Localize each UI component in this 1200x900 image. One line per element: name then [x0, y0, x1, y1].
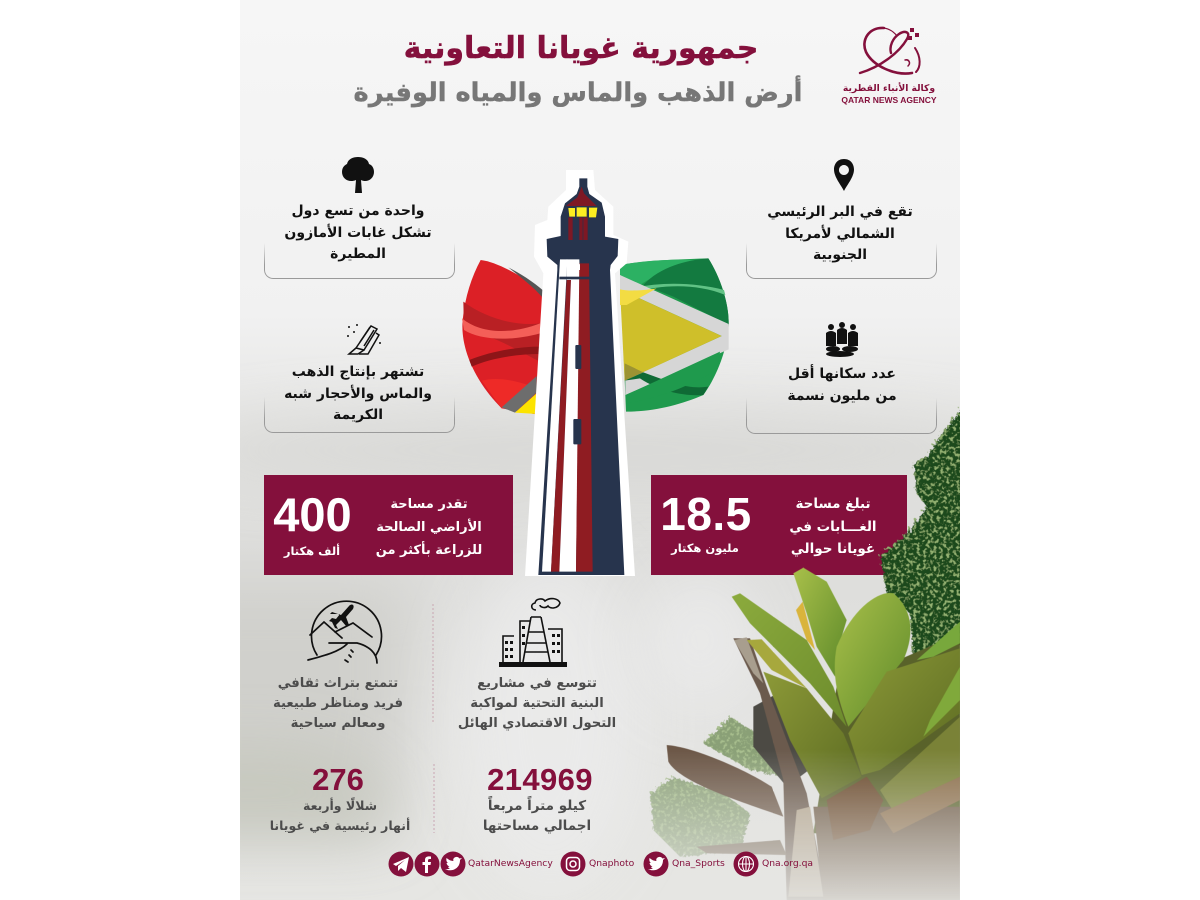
card outline [746, 243, 937, 279]
icon: map pin [834, 159, 854, 191]
logo Arabic name: وكالة الأنباء القطرية [843, 83, 935, 94]
forest area text [789, 496, 877, 557]
social media bar [388, 852, 813, 876]
total area text: اجمالي مساحتها [483, 818, 591, 834]
background photo: misty waterfall and forest [240, 0, 960, 900]
icon: tree [342, 157, 374, 193]
Amazon text [284, 203, 432, 262]
panel: population [746, 322, 937, 434]
icon: plane, mountains and road [307, 600, 382, 664]
forest area text: تبلغ مساحة [795, 496, 871, 512]
panel: Amazon forests [264, 157, 455, 279]
arable land text: للزراعة بأكثر من [376, 543, 482, 558]
total area text: كيلو متراً مربعاً [488, 798, 586, 814]
panel: forest area [651, 475, 907, 575]
forest area number: 18.5 [660, 488, 752, 540]
population text: عدد سكانها أقل [788, 366, 896, 382]
card outline [264, 397, 455, 433]
panel: heritage and tourism [273, 600, 403, 731]
card outline [264, 243, 455, 279]
photo: tropical plant and tree [649, 406, 960, 900]
icon: instagram [560, 852, 586, 876]
waterfalls text [270, 797, 410, 833]
location text: الشمالي لأمريكا [785, 226, 895, 242]
arable land text: الأراضي الصالحة [376, 520, 482, 535]
location text [767, 204, 913, 263]
lighthouse white halo [525, 170, 635, 576]
icon: telegram [388, 852, 414, 876]
infrastructure text [458, 676, 616, 731]
forest area text: غويانا حوالي [791, 541, 875, 557]
panel: waterfalls and rivers [270, 762, 410, 833]
handle: Qna_Sports: Qna_Sports [672, 858, 725, 869]
arable land text: تقدر مساحة [390, 497, 468, 512]
icon: gold bars [347, 324, 381, 355]
waterfalls text: أنهار رئيسية في غويانا [270, 818, 410, 833]
icon: factory and city [499, 598, 567, 667]
right flag wing [620, 258, 729, 412]
population text [787, 364, 897, 404]
waterfalls number: 276 [312, 762, 364, 797]
total area number: 214969 [487, 762, 593, 797]
panel: gold and diamonds [264, 324, 455, 433]
handle: Qnaphoto: Qnaphoto [589, 858, 634, 869]
panel: location [746, 159, 937, 279]
icon: twitter sports [644, 852, 668, 876]
lighthouse [538, 178, 624, 575]
poster canvas [240, 0, 960, 900]
heritage text [273, 676, 403, 731]
Amazon text: المطيرة [330, 246, 386, 262]
infrastructure text: التحول الاقتصادي الهائل [458, 716, 616, 731]
handle: Qna.org.qa: Qna.org.qa [762, 858, 813, 869]
icon: globe [734, 852, 758, 876]
forest area unit: مليون هكتار [671, 541, 739, 555]
heritage text: ومعالم سياحية [291, 716, 385, 731]
location text: الجنوبية [813, 247, 867, 263]
heritage text: فريد ومناظر طبيعية [273, 696, 403, 711]
arable land unit: ألف هكتار [284, 544, 340, 558]
panel: arable land [264, 475, 513, 575]
gold text [284, 364, 432, 423]
Amazon text: تشكل غابات الأمازون [284, 224, 432, 240]
gold text: والماس والأحجار شبه [284, 386, 432, 402]
panel: total area [483, 762, 593, 834]
total area text [483, 796, 591, 834]
heritage text: تتمتع بتراث ثقافي [278, 676, 398, 691]
icon: facebook [414, 852, 440, 876]
icon: group of people [826, 322, 858, 357]
logo: Qatar News Agency [841, 26, 937, 105]
card outline [746, 398, 937, 434]
handle: QatarNewsAgency: QatarNewsAgency [468, 858, 553, 869]
infrastructure text: تتوسع في مشاريع [477, 676, 597, 691]
location text: تقع في البر الرئيسي [767, 204, 913, 220]
icon: twitter [440, 852, 466, 876]
waterfalls text: شلالًا وأربعة [303, 798, 377, 813]
forest area text: الغـــابات في [789, 518, 877, 534]
flag wings and lighthouse [462, 170, 729, 576]
panel: infrastructure [458, 598, 616, 731]
arable land text [376, 497, 482, 558]
Amazon text: واحدة من تسع دول [292, 203, 424, 219]
logo English name: QATAR NEWS AGENCY [841, 95, 937, 105]
subtitle: أرض الذهب والماس والمياه الوفيرة [354, 78, 802, 108]
infrastructure text: البنية التحتية لمواكبة [470, 696, 604, 711]
title: جمهورية غويانا التعاونية [404, 31, 758, 66]
arable land number: 400 [273, 488, 352, 541]
gold text: تشتهر بإنتاج الذهب [292, 364, 424, 380]
population text: من مليون نسمة [787, 388, 897, 404]
gold text: الكريمة [333, 407, 383, 423]
left flag wing [462, 260, 543, 415]
